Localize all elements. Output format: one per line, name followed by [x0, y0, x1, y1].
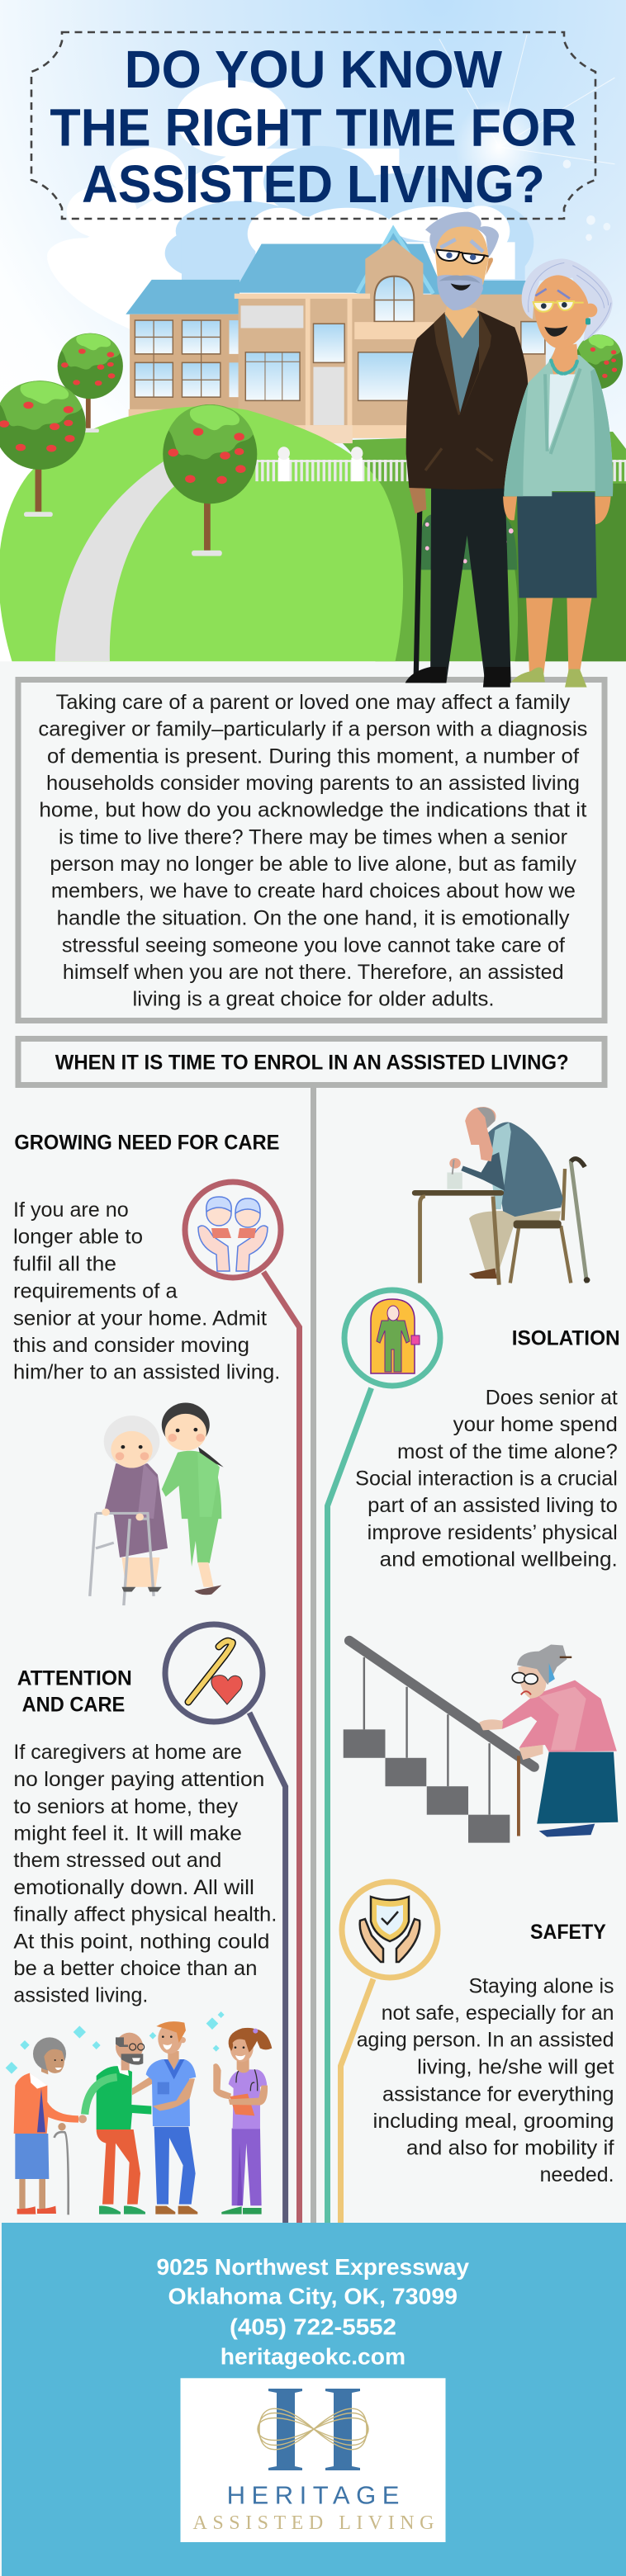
body text: Staying alone is [469, 1974, 614, 1997]
hero scene: sky, house, hill and trees [0, 0, 626, 661]
timeline: attention connector [249, 1713, 286, 2224]
house [126, 228, 546, 443]
heading: ISOLATION [512, 1326, 620, 1349]
body text: them stressed out and [13, 1849, 221, 1872]
block: attention and care [6, 1624, 277, 2214]
heading: AND CARE [22, 1693, 125, 1716]
panel: footer [2, 2223, 626, 2576]
body text: requirements of a [13, 1279, 178, 1302]
body text: assisted living. [13, 1983, 148, 2006]
walkway [55, 457, 178, 661]
block: safety [342, 1641, 618, 2186]
back hill [339, 432, 626, 661]
senior man [405, 212, 528, 688]
block: isolation [344, 1107, 620, 1572]
icon: cane and heart [165, 1624, 263, 1722]
contact details: 9025 Northwest Expressway [157, 2254, 469, 2280]
intro text: caregiver or family–particularly if a person with a diagnosis [38, 718, 587, 741]
body text: to seniors at home, they [13, 1795, 239, 1818]
apple tree: left [0, 380, 86, 517]
body text: If caregivers at home are [13, 1741, 242, 1764]
body text: your home spend [453, 1413, 618, 1436]
icon: hands holding seniors [185, 1182, 281, 1278]
intro text: of dementia is present. During this moment, a number of [47, 744, 579, 768]
body text: including meal, grooming [373, 2110, 614, 2133]
illustration: senior woman climbing stairs [344, 1641, 618, 1843]
bush with flowers [421, 514, 517, 570]
body text: finally affect physical health. [13, 1902, 277, 1926]
body text: no longer paying attention [13, 1768, 264, 1791]
sun flare [439, 35, 614, 241]
contact details: Oklahoma City, OK, 73099 [168, 2284, 458, 2309]
title text: ASSISTED LIVING? [82, 154, 545, 214]
intro text: Taking care of a parent or loved one may affect a family [56, 691, 571, 714]
body text: fulfil all the [13, 1253, 116, 1276]
contact details: heritageokc.com [221, 2344, 405, 2370]
body text: emotionally down. All will [13, 1876, 254, 1899]
body text: living, he/she will get [417, 2055, 614, 2078]
logo wordmark: HERITAGE [227, 2480, 399, 2509]
body text: Social interaction is a crucial [355, 1468, 618, 1491]
intro text: himself when you are not there. Therefore, an assisted [63, 961, 564, 984]
heading: SAFETY [530, 1921, 606, 1944]
body text: and emotional wellbeing. [380, 1548, 618, 1572]
body text: not safe, especially for an [382, 2002, 614, 2025]
panel: section heading [18, 1038, 605, 1085]
intro text [38, 691, 587, 1011]
right slope [483, 484, 626, 661]
intro text: is time to live there? There may be times when a senior [59, 825, 567, 848]
body text: improve residents’ physical [368, 1521, 618, 1544]
clouds [47, 80, 534, 332]
senior man in green [85, 2033, 151, 2214]
footer background [2, 2223, 626, 2576]
body text: part of an assisted living to [368, 1494, 618, 1517]
body text: Does senior at [486, 1386, 618, 1409]
intro text: members, we have to create hard choices about how we [51, 880, 576, 903]
logo tagline: ASSISTED LIVING [193, 2512, 434, 2534]
senior woman [503, 258, 613, 688]
body text: be a better choice than an [13, 1957, 257, 1980]
apple tree: right [575, 334, 623, 389]
intro text: living is a great choice for older adults. [132, 988, 494, 1011]
body text: assistance for everything [382, 2082, 614, 2106]
timeline: central divider [311, 1088, 316, 2224]
body text: most of the time alone? [397, 1440, 618, 1463]
senior woman with cane [14, 2037, 87, 2214]
body text [13, 1741, 277, 2006]
timeline: growing need connector [263, 1272, 299, 2224]
decorative diamonds [6, 2011, 225, 2074]
icon: shield and hands [342, 1882, 438, 1978]
logo mark [258, 2389, 368, 2470]
title with dashed frame [31, 32, 595, 219]
heading [17, 1666, 132, 1716]
intro text: households consider moving parents to an assisted living [46, 772, 580, 795]
sky [0, 0, 626, 661]
contact details [157, 2254, 469, 2370]
illustration: nurse helping senior with walker [90, 1403, 224, 1605]
male nurse in blue [132, 2021, 197, 2214]
heading text: WHEN IT IS TIME TO ENROL IN AN ASSISTED LIVING? [55, 1052, 569, 1075]
title text [50, 40, 576, 214]
icon: person locked in doorway [344, 1290, 440, 1386]
timeline: safety connector [340, 1979, 373, 2224]
body text: and also for mobility if [406, 2136, 614, 2159]
body text [355, 1386, 618, 1572]
apple tree: back [58, 333, 123, 432]
body text: might feel it. It will make [13, 1822, 242, 1845]
body text: longer able to [13, 1226, 143, 1249]
logo: Heritage Assisted Living [180, 2378, 446, 2542]
body text: If you are no [13, 1198, 129, 1222]
fence [255, 447, 626, 481]
intro text: person may no longer be able to live alone, but as family [50, 853, 577, 876]
title text: THE RIGHT TIME FOR [50, 97, 576, 157]
body text: At this point, nothing could [13, 1930, 269, 1953]
body text [357, 1974, 614, 2186]
dashed frame [31, 32, 595, 219]
title text: DO YOU KNOW [125, 40, 503, 99]
body text: needed. [540, 2163, 614, 2186]
intro text: home, but how do you acknowledge the indications that it [39, 799, 586, 822]
illustration: seniors with caregivers [6, 2011, 272, 2214]
body text: him/her to an assisted living. [13, 1360, 280, 1383]
block: growing need for care [13, 1131, 281, 1605]
intro text: handle the situation. On the one hand, it is emotionally [57, 907, 570, 930]
intro frame [18, 680, 605, 1020]
body text [13, 1198, 280, 1383]
illustration: senior man alone at table [412, 1107, 590, 1285]
couple: senior man and woman [405, 212, 613, 688]
heading: GROWING NEED FOR CARE [14, 1131, 279, 1154]
apple tree: front [163, 404, 257, 556]
body text: senior at your home. Admit [13, 1307, 267, 1330]
body text: this and consider moving [13, 1334, 249, 1357]
front lawn [0, 406, 403, 661]
female nurse in purple [213, 2028, 272, 2214]
heading frame [18, 1038, 605, 1085]
timeline: isolation connector [327, 1388, 372, 2224]
heading: ATTENTION [17, 1666, 132, 1690]
panel: introduction [18, 680, 605, 1020]
intro text: stressful seeing someone you love cannot take care of [62, 934, 565, 957]
contact details: (405) 722-5552 [230, 2314, 396, 2339]
body text: aging person. In an assisted [357, 2028, 614, 2051]
